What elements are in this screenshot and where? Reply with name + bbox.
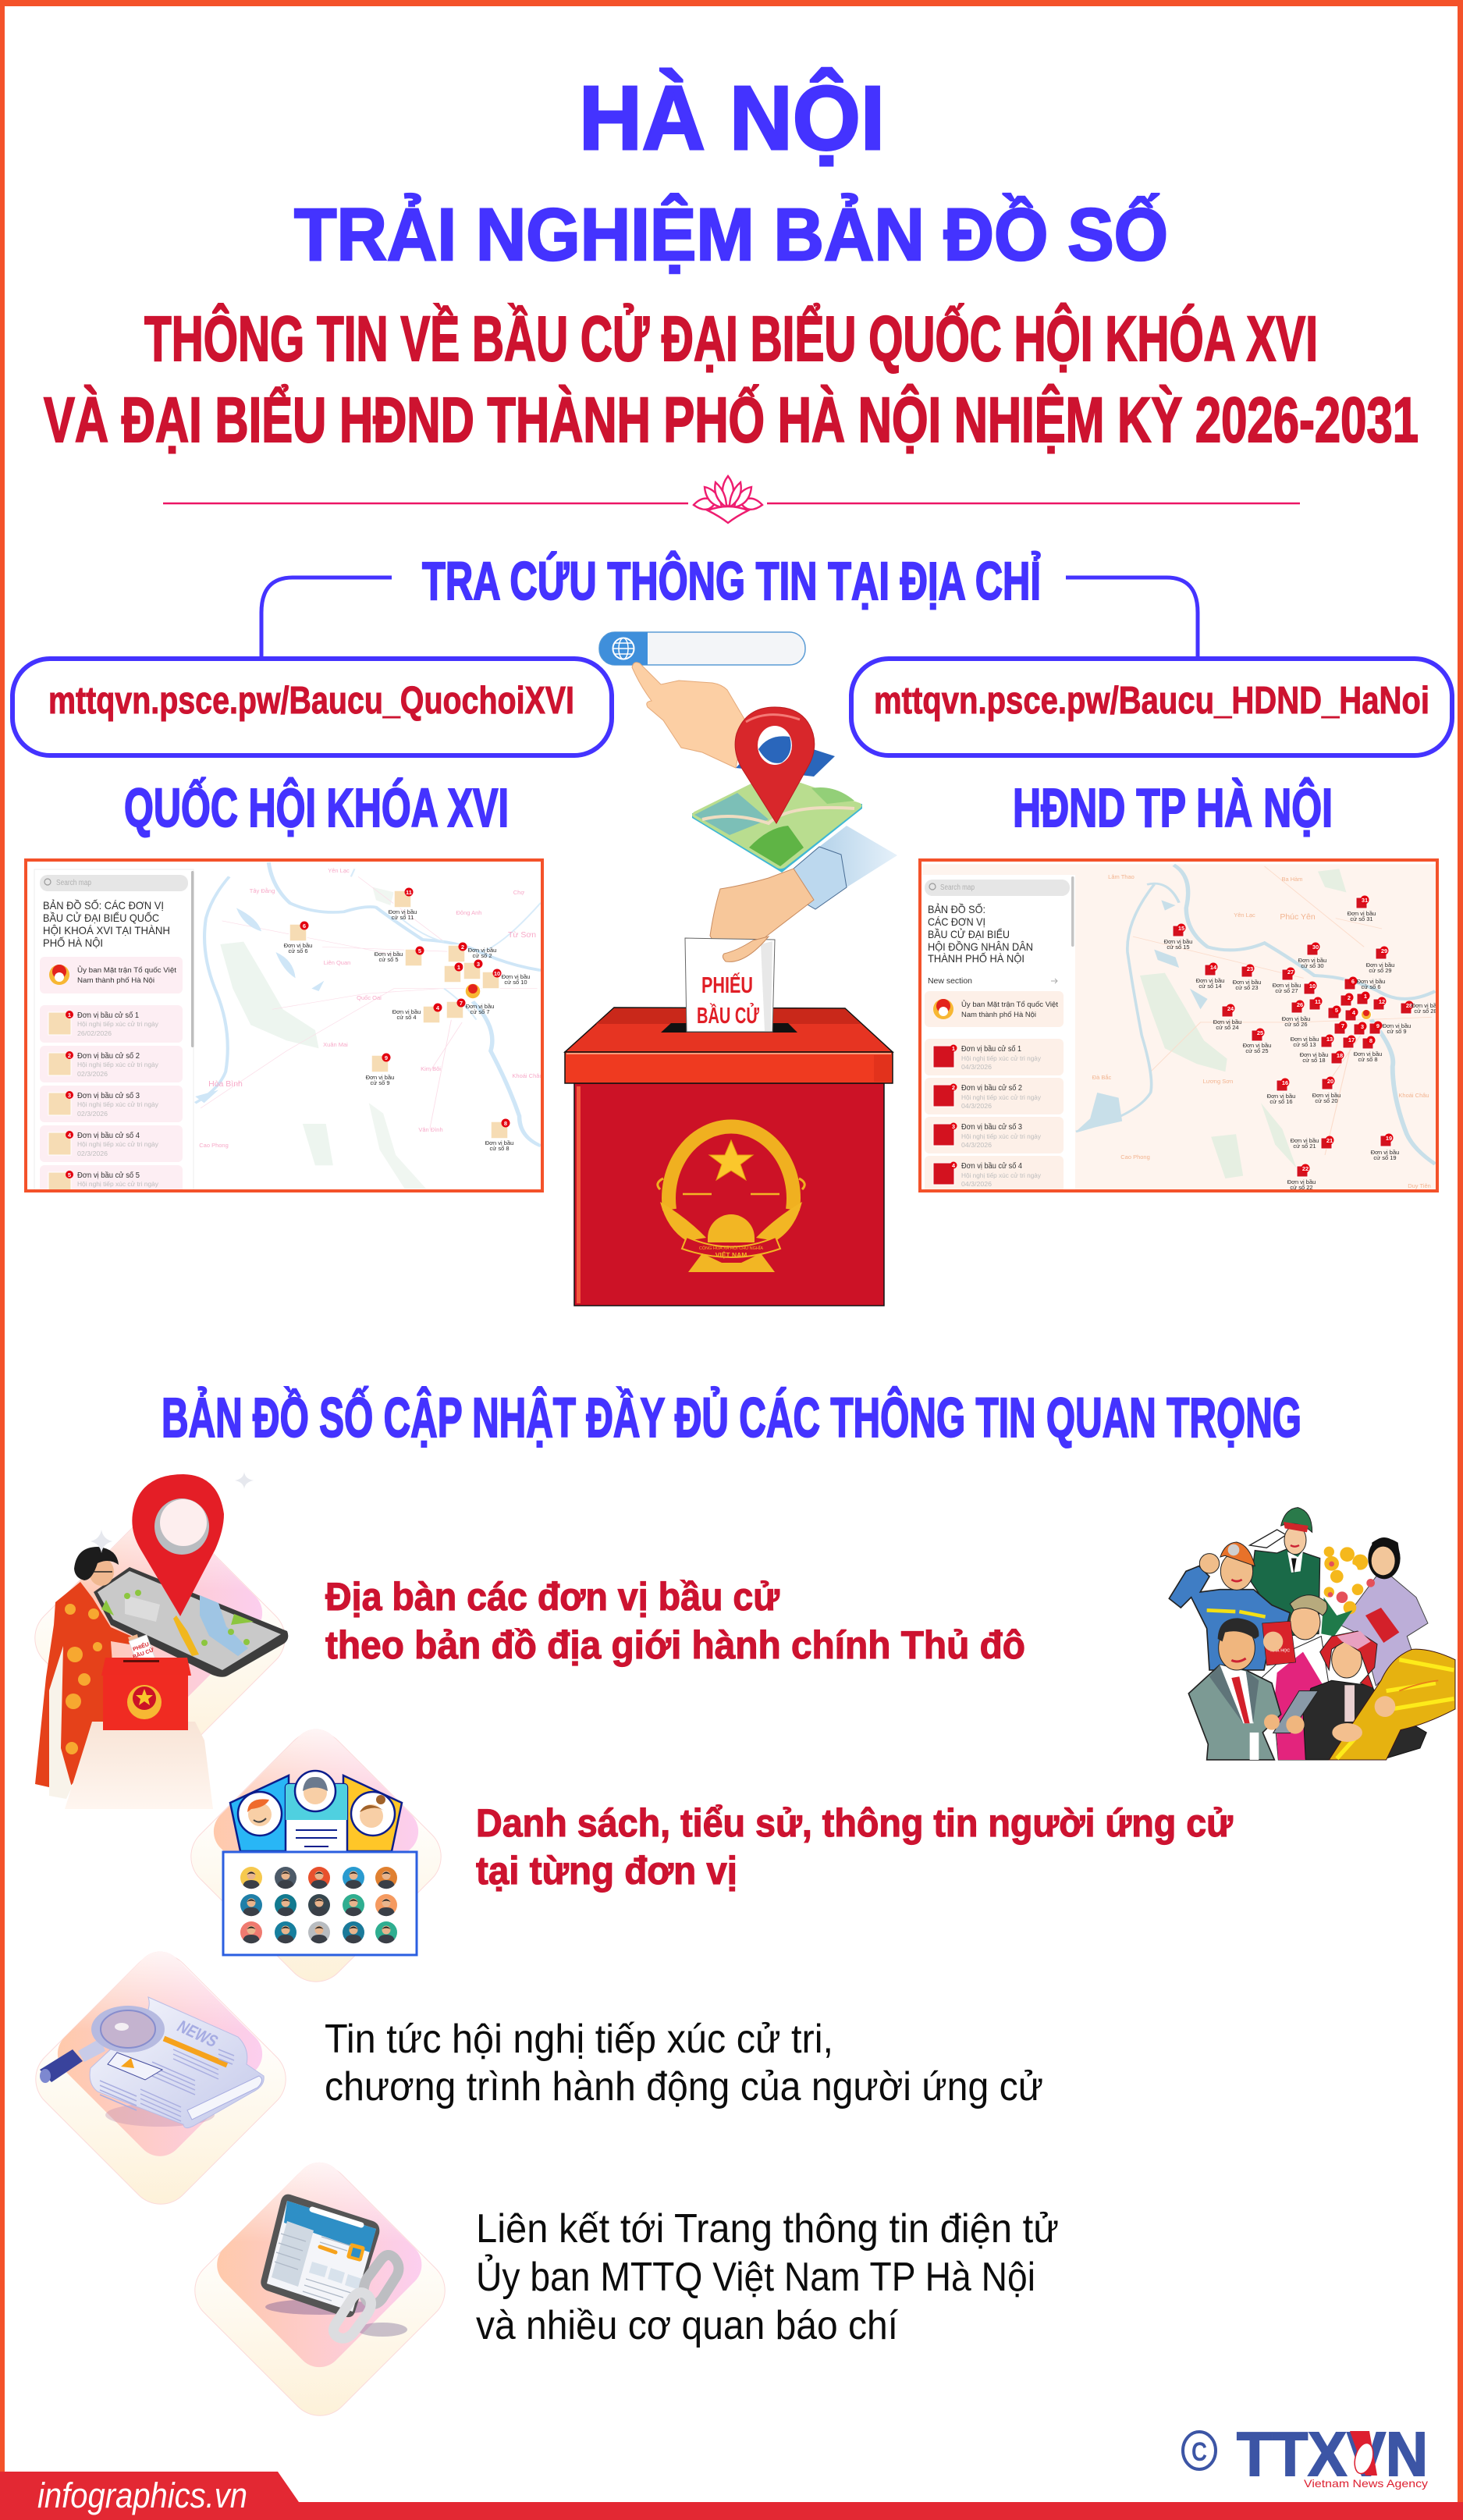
icon: national emblem: VIỆT NAM	[716, 1250, 747, 1259]
right sidebar: BẢN ĐỒ SỐ:	[928, 902, 985, 915]
place names right: Cao Phong	[1120, 1153, 1150, 1160]
left map markers: 5	[418, 947, 421, 954]
image in newspaper	[108, 2053, 162, 2080]
left map markers: 3	[477, 961, 480, 968]
ballot paper: PHIẾU	[701, 972, 753, 998]
ballot: BẦU CỬ	[132, 1645, 154, 1660]
right sidebar: 1	[952, 1045, 955, 1052]
place names left: Kim Bôi	[421, 1065, 441, 1072]
left sidebar: Đơn vị bầu cử số 1	[77, 1011, 139, 1020]
right map markers: Đơn vị bầu	[1291, 1137, 1319, 1144]
place names right	[1092, 873, 1431, 1189]
footer bar	[0, 2472, 1463, 2520]
right sidebar: Ủy ban Mặt trận Tổ quốc Việt	[961, 1000, 1058, 1009]
right map markers: Đơn vị bầu	[1357, 978, 1385, 985]
left sidebar: 5	[68, 1171, 71, 1178]
right map markers: 17	[1348, 1036, 1355, 1043]
left sidebar: 1	[68, 1011, 71, 1018]
right sidebar: 04/3/2026	[961, 1141, 992, 1149]
right map markers: Đơn vị bầu	[1371, 1149, 1399, 1156]
icon: blue sleeve	[736, 734, 835, 777]
right map markers: 25	[1257, 1029, 1263, 1036]
right map markers: 22	[1302, 1165, 1309, 1172]
woman in pink apron: NHÀ HỌC	[1270, 1648, 1290, 1654]
logo: TTXVN: TTXVN	[1237, 2419, 1428, 2489]
text: tin tức: chương trình hành động của người ứng cử	[325, 2064, 1043, 2109]
right map markers: cử số 21	[1293, 1143, 1316, 1150]
logo: TTXVN: C	[1191, 2437, 1207, 2467]
right map markers: 16	[1282, 1079, 1288, 1086]
text: địa bàn: theo bản đồ địa giới hành chính Thủ đô	[325, 1623, 1025, 1667]
title: Hà Nội: HÀ NỘI	[579, 67, 885, 169]
place names left: Chợ	[513, 889, 524, 896]
right map markers: 15	[1178, 925, 1184, 932]
right map markers: Đơn vị bầu	[1282, 1015, 1310, 1022]
text: liên kết: Liên kết tới Trang thông tin điện tử	[476, 2206, 1059, 2252]
url box left	[12, 659, 612, 755]
place names left: Liên Quan	[324, 959, 350, 966]
right map markers: 30	[1312, 944, 1319, 951]
text: địa bàn: Địa bàn các đơn vị bầu cử	[325, 1575, 780, 1619]
right map markers: cử số 9	[1387, 1028, 1407, 1035]
right map markers: Đơn vị bầu	[1213, 1018, 1241, 1025]
left map markers	[284, 888, 530, 1152]
ballot: PHIẾU	[132, 1640, 150, 1653]
right sidebar: Hội nghị tiếp xúc cử tri ngày	[961, 1132, 1042, 1140]
left sidebar: Hội nghị tiếp xúc cử tri ngày	[77, 1180, 159, 1188]
icon: voter with phone and pin	[22, 1472, 298, 1809]
text: danh sách	[476, 1801, 1234, 1893]
right map markers: 12	[1379, 998, 1385, 1005]
right map markers: Đơn vị bầu	[1196, 977, 1224, 984]
right sidebar: HỘI ĐỒNG NHÂN DÂN	[928, 940, 1033, 953]
magnifier	[40, 2006, 165, 2083]
left map markers: 8	[504, 1120, 507, 1127]
left map markers: Đơn vị bầu	[392, 1008, 421, 1015]
people illustration	[1169, 1508, 1455, 1760]
right map markers: Đơn vị bầu	[1291, 1036, 1319, 1043]
left sidebar: BẦU CỬ ĐẠI BIỂU QUỐC	[43, 911, 159, 924]
right card	[343, 1775, 402, 1851]
icon: newspaper and magnifier	[23, 1941, 299, 2217]
site name: infographics.vn	[37, 2476, 247, 2515]
divider with lotus	[163, 476, 1300, 523]
right map markers: cử số 22	[1290, 1184, 1313, 1191]
worker	[1169, 1542, 1290, 1670]
panel: map Quốc hội	[26, 860, 543, 1202]
right map markers: 13	[1326, 1036, 1333, 1043]
icon: shirt cuff	[794, 847, 847, 909]
newspaper	[90, 1997, 264, 2128]
right sidebar: 04/3/2026	[961, 1102, 992, 1110]
left map markers: cử số 2	[472, 952, 492, 959]
left map markers: 7	[460, 1000, 463, 1007]
left sidebar: 4	[68, 1132, 72, 1139]
right map markers: 14	[1210, 964, 1217, 971]
ballot	[127, 1634, 157, 1665]
diamonds 4	[182, 2152, 458, 2429]
right map markers: cử số 26	[1284, 1021, 1308, 1028]
right map markers: Đơn vị bầu	[1354, 1050, 1382, 1057]
location pin	[132, 1474, 224, 1616]
place names right: Lâm Thao	[1108, 873, 1135, 880]
right sidebar: New section	[928, 977, 972, 986]
right map markers: cử số 29	[1369, 967, 1392, 974]
text: danh sách: tại từng đơn vị	[476, 1849, 737, 1893]
lookup heading: TRA CỨU THÔNG TIN TẠI ĐỊA CHỈ	[422, 551, 1041, 611]
right map markers: Đơn vị bầu	[1348, 910, 1376, 917]
right map markers: 10	[1309, 983, 1316, 990]
right map markers: cử số 15	[1166, 944, 1190, 951]
right map markers: 5	[1335, 1007, 1338, 1014]
left sidebar: Đơn vị bầu cử số 4	[77, 1131, 140, 1140]
left sidebar: Đơn vị bầu cử số 2	[77, 1051, 140, 1061]
icon: thumb	[723, 937, 769, 961]
left sidebar: Search map	[56, 879, 91, 887]
icon: national emblem: CỘNG HÒA XÃ HỘI CHỦ NGHĨA	[699, 1246, 763, 1251]
icon: map plate	[692, 774, 862, 873]
place names left: Vân Đình	[418, 1126, 443, 1133]
place names left	[199, 867, 543, 1149]
place names left: Tây Đằng	[250, 887, 275, 894]
right map markers: Đơn vị bầu	[1412, 1002, 1440, 1009]
browser window	[261, 2195, 379, 2317]
diamonds 3	[23, 1941, 299, 2217]
logo: TTXVN: Vietnam News Agency	[1304, 2477, 1428, 2490]
right map markers: Đơn vị bầu	[1273, 982, 1301, 989]
right map markers: Đơn vị bầu	[1300, 1051, 1328, 1058]
left sidebar: Đơn vị bầu cử số 5	[77, 1171, 140, 1180]
left sidebar: Hội nghị tiếp xúc cử tri ngày	[77, 1100, 159, 1108]
left map markers: 1	[457, 964, 460, 971]
woman with flowers	[1321, 1537, 1428, 1686]
right map markers: Đơn vị bầu	[1312, 1092, 1340, 1099]
right map markers: cử số 27	[1275, 987, 1298, 994]
text: liên kết: và nhiều cơ quan báo chí	[476, 2303, 899, 2348]
left map markers: Đơn vị bầu	[468, 947, 496, 954]
right sidebar: BẦU CỬ ĐẠI BIỂU	[928, 927, 1010, 940]
left sidebar: 02/3/2026	[77, 1070, 108, 1078]
url box left: mttqvn.psce.pw/Baucu_QuochoiXVI	[48, 680, 574, 722]
right map markers: cử số 19	[1373, 1154, 1397, 1161]
left sidebar: Hội nghị tiếp xúc cử tri ngày	[77, 1020, 159, 1028]
left map geography	[195, 862, 541, 1189]
label: Quốc hội: QUỐC HỘI KHÓA XVI	[124, 777, 509, 838]
right map markers: 9	[1376, 1022, 1380, 1029]
left sidebar: Ủy ban Mặt trận Tổ quốc Việt	[77, 965, 176, 975]
sparkles	[91, 1472, 254, 1553]
right map markers: cử số 18	[1302, 1057, 1326, 1064]
left sidebar: Hội nghị tiếp xúc cử tri ngày	[77, 1140, 159, 1148]
left sidebar: Nam thành phố Hà Nội	[77, 976, 154, 985]
diamonds 1	[22, 1500, 298, 1776]
place names left: Khoái Châu	[512, 1072, 543, 1079]
place names left: Từ Sơn	[508, 930, 536, 940]
right map markers: 8	[1369, 1037, 1372, 1044]
left sidebar: 26/02/2026	[77, 1029, 112, 1037]
central illustration: hand, map, ballot box	[565, 632, 897, 1306]
left map markers: 10	[494, 970, 500, 977]
right map markers: Đơn vị bầu	[1267, 1093, 1295, 1100]
right map markers: cử số 6	[1361, 983, 1381, 990]
place names left: Hòa Bình	[208, 1079, 243, 1089]
left map markers: 6	[303, 922, 306, 929]
icon: candidate list	[178, 1719, 454, 1995]
right map markers: cử số 8	[1358, 1056, 1378, 1063]
icon: national emblem	[658, 1126, 804, 1272]
left map markers: Đơn vị bầu	[389, 908, 417, 915]
connector left	[261, 578, 392, 657]
icon: search bar	[599, 632, 805, 665]
icon: browser and chain link	[182, 2152, 458, 2429]
right map markers: cử số 24	[1216, 1024, 1239, 1031]
right map markers: 24	[1227, 1005, 1234, 1012]
right map markers: cử số 28	[1414, 1008, 1437, 1015]
icon: hand holding ballot	[710, 869, 814, 961]
ballot paper	[685, 938, 775, 1032]
news headline: NEWS	[173, 2017, 222, 2051]
left sidebar: PHỐ HÀ NỘI	[43, 936, 103, 949]
mini ballot box	[101, 1658, 191, 1730]
place names right: Đà Bắc	[1092, 1074, 1112, 1081]
place names right: Phúc Yên	[1280, 912, 1316, 922]
right sidebar: Nam thành phố Hà Nội	[961, 1011, 1036, 1019]
woman in pink apron	[1262, 1595, 1329, 1760]
icon: faded shirt sleeve	[819, 826, 897, 887]
left map markers: cử số 10	[504, 979, 527, 986]
left sidebar: HỘI KHOÁ XVI TẠI THÀNH	[43, 924, 170, 937]
label: HĐND: HĐND TP HÀ NỘI	[1013, 777, 1333, 838]
left map markers: Đơn vị bầu	[366, 1074, 394, 1081]
icon: pointing hand	[632, 663, 745, 768]
subtitle: trải nghiệm bản đồ số: TRẢI NGHIỆM BẢN ĐỒ SỐ	[294, 194, 1168, 276]
left map markers: Đơn vị bầu	[375, 951, 403, 958]
businessman	[1188, 1618, 1318, 1760]
right sidebar: 4	[952, 1162, 956, 1169]
right map markers: cử số 14	[1198, 983, 1222, 990]
left map markers: 4	[436, 1004, 440, 1011]
left sidebar: 2	[68, 1052, 71, 1059]
ballot box body	[565, 1052, 893, 1306]
right map geography	[921, 864, 1436, 1192]
right map markers: Đơn vị bầu	[1164, 938, 1192, 945]
place names left: Yên Lạc	[328, 867, 350, 874]
right sidebar: Search map	[940, 883, 975, 892]
left map markers: cử số 9	[370, 1079, 390, 1086]
right sidebar: Đơn vị bầu cử số 2	[961, 1083, 1022, 1093]
right map markers: cử số 31	[1350, 915, 1373, 922]
left sidebar: 3	[68, 1092, 71, 1099]
right map markers: cử số 20	[1315, 1097, 1338, 1104]
left sidebar: Đơn vị bầu cử số 3	[77, 1091, 140, 1100]
right map markers: cử số 23	[1235, 984, 1259, 991]
left map markers: cử số 11	[392, 914, 414, 921]
place names right: Yên Lạc	[1234, 912, 1255, 919]
right map markers: Đơn vị bầu	[1243, 1042, 1271, 1049]
left sidebar: 02/3/2026	[77, 1150, 108, 1157]
right map markers: 1	[1364, 993, 1367, 1000]
right map markers: Đơn vị bầu	[1233, 979, 1261, 986]
place names left: Cao Phong	[199, 1142, 229, 1149]
left map markers: Đơn vị bầu	[284, 942, 312, 949]
right map markers: cử số 13	[1293, 1041, 1316, 1048]
right map markers: 28	[1406, 1002, 1412, 1009]
centre card	[286, 1771, 347, 1854]
right map markers: 29	[1381, 947, 1387, 954]
right sidebar: 2	[952, 1084, 955, 1091]
right map markers: 3	[1361, 1023, 1364, 1030]
candidates grid	[223, 1852, 417, 1955]
text: danh sách: Danh sách, tiểu sử, thông tin người ứng cử	[476, 1801, 1234, 1845]
text: liên kết: Ủy ban MTTQ Việt Nam TP Hà Nội	[476, 2254, 1035, 2300]
right map markers: 6	[1351, 978, 1355, 985]
right sidebar: Hội nghị tiếp xúc cử tri ngày	[961, 1171, 1042, 1179]
right map markers: cử số 16	[1269, 1098, 1293, 1105]
place names right: Khoái Châu	[1398, 1092, 1429, 1099]
chain link	[333, 2255, 399, 2338]
right map markers: Đơn vị bầu	[1383, 1022, 1411, 1029]
place names right: Ba Hàm	[1281, 876, 1303, 883]
wheat sheaf	[1329, 1649, 1455, 1760]
right sidebar: 3	[952, 1123, 955, 1130]
right map markers: 2	[1348, 994, 1351, 1001]
place names left: Đông Anh	[456, 909, 481, 916]
text: tin tức	[325, 2017, 1043, 2109]
right sidebar: CÁC ĐƠN VỊ	[928, 915, 985, 928]
left map markers: cử số 4	[396, 1014, 417, 1021]
ballot paper: BẦU CỬ	[697, 1002, 760, 1029]
right map markers: Đơn vị bầu	[1287, 1178, 1316, 1185]
right sidebar: THÀNH PHỐ HÀ NỘI	[928, 951, 1024, 965]
right sidebar: Đơn vị bầu cử số 3	[961, 1122, 1022, 1132]
right sidebar: Đơn vị bầu cử số 1	[961, 1044, 1021, 1054]
icon: location pin	[735, 707, 815, 823]
right map markers: 7	[1341, 1022, 1344, 1029]
connector right	[1066, 578, 1198, 657]
right map markers: 19	[1386, 1135, 1392, 1142]
right map markers: cử số 25	[1245, 1047, 1269, 1054]
right sidebar: Hội nghị tiếp xúc cử tri ngày	[961, 1054, 1042, 1062]
right map markers: 18	[1337, 1052, 1343, 1059]
right map markers: 11	[1315, 998, 1321, 1005]
right map markers: 20	[1327, 1078, 1333, 1085]
right map markers: 23	[1247, 965, 1253, 972]
phone	[94, 1567, 288, 1677]
right map markers: 21	[1326, 1137, 1333, 1144]
left card	[230, 1775, 289, 1851]
left map markers: Đơn vị bầu	[466, 1003, 494, 1010]
left map markers: cử số 8	[489, 1145, 510, 1152]
right map markers	[1164, 896, 1440, 1191]
right sidebar: 04/3/2026	[961, 1180, 992, 1188]
left map markers: 11	[406, 889, 412, 896]
left sidebar: BẢN ĐỒ SỐ: CÁC ĐƠN VỊ	[43, 898, 164, 912]
left map markers: cử số 7	[470, 1008, 490, 1015]
left map markers: Đơn vị bầu	[502, 973, 530, 980]
table cloth	[65, 1722, 213, 1809]
right map markers: Đơn vị bầu	[1298, 957, 1326, 964]
right sidebar: Đơn vị bầu cử số 4	[961, 1161, 1022, 1171]
woman in ao dai	[35, 1547, 139, 1799]
left sidebar: 02/3/2026	[77, 1110, 108, 1118]
right map markers: 27	[1287, 969, 1294, 976]
place names right: Lương Sơn	[1203, 1078, 1233, 1085]
left map markers: 9	[385, 1054, 388, 1061]
left map markers: Đơn vị bầu	[485, 1139, 513, 1146]
ballot box lid top	[565, 1008, 893, 1052]
right map markers: 31	[1362, 897, 1368, 904]
right sidebar: Hội nghị tiếp xúc cử tri ngày	[961, 1093, 1042, 1101]
diamonds 2	[178, 1719, 454, 1995]
place names right: Duy Tiên	[1408, 1182, 1431, 1189]
place names left: Quốc Oai	[357, 994, 382, 1001]
right sidebar: 04/3/2026	[961, 1063, 992, 1071]
right map markers: 4	[1352, 1009, 1356, 1016]
left sidebar	[34, 869, 194, 1202]
right map markers: 26	[1297, 1001, 1303, 1008]
left map markers: 2	[461, 944, 464, 951]
right sidebar	[920, 875, 1075, 1195]
woman with wheat	[1303, 1631, 1426, 1760]
left map markers: cử số 5	[378, 956, 399, 963]
left map markers: cử số 6	[288, 947, 308, 954]
right map markers: Đơn vị bầu	[1366, 961, 1394, 969]
text: tin tức: Tin tức hội nghị tiếp xúc cử tri,	[325, 2017, 833, 2062]
url box right	[851, 659, 1452, 755]
right map markers: cử số 30	[1301, 962, 1324, 969]
place names left: Xuân Mai	[323, 1041, 348, 1048]
text: địa bàn	[325, 1575, 1025, 1667]
left sidebar: Hội nghị tiếp xúc cử tri ngày	[77, 1061, 159, 1068]
panel: map HĐND	[920, 860, 1440, 1195]
soldier	[1250, 1508, 1320, 1637]
text: liên kết	[476, 2206, 1059, 2348]
